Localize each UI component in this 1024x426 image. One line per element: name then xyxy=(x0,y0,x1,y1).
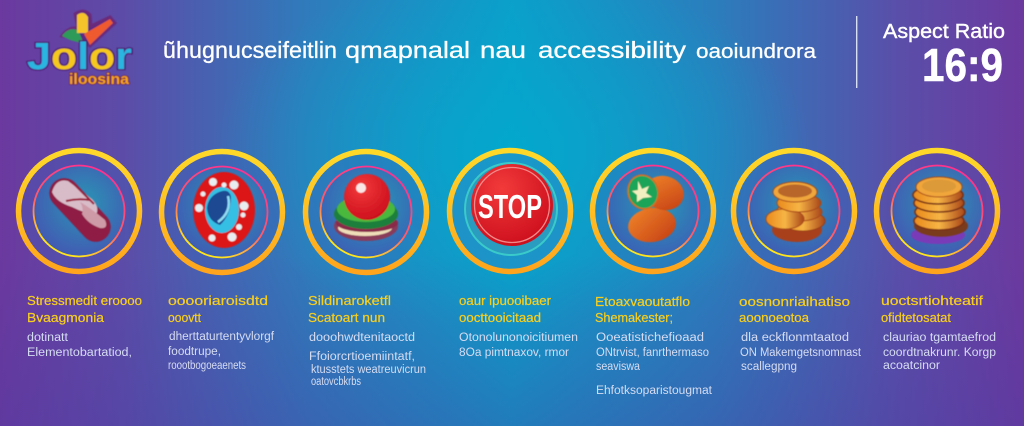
text column 2: ooovtt xyxy=(168,310,201,325)
stop label: STOP xyxy=(478,188,542,225)
icon 6: pile of coins xyxy=(734,150,854,272)
aspect ratio value: 16:9 xyxy=(922,39,1003,91)
text column 4: oaur ipuooibaer xyxy=(459,293,552,308)
text column 5: Etoaxvaoutatflo xyxy=(595,294,690,309)
icon 7: stacked coins xyxy=(876,150,998,272)
text column 1: Elementobartatiod, xyxy=(27,347,132,359)
title: accessibility xyxy=(538,37,687,63)
text column 5: Shemakester; xyxy=(595,310,673,325)
text column 6: ON Makemgetsnomnast xyxy=(740,347,862,359)
aspect ratio xyxy=(883,21,1005,91)
title: oaoiundrora xyxy=(696,41,817,63)
text column 2 xyxy=(168,293,275,372)
text column 6: oosnonriaihatiso xyxy=(739,294,850,309)
text column 3: Ffoiorcrtioemiintatf, xyxy=(309,351,415,363)
icon 4: stop button xyxy=(450,150,570,272)
text column 5: ONtrvist, fanrthermaso xyxy=(596,347,709,359)
text column 3: ktusstets weatreuvicrun xyxy=(311,364,426,376)
text column 5: Ehfotksoparistougmat xyxy=(596,385,713,397)
text column 3: dooohwdtenitaoctd xyxy=(309,332,415,344)
text column 5: seaviswa xyxy=(596,361,641,373)
text column 2: dherttaturtentyvlorgf xyxy=(169,331,275,343)
text column 3: Scatoart nun xyxy=(308,310,385,325)
icon 1: bandage xyxy=(18,150,140,272)
icon 2: jewelled gem xyxy=(162,152,282,272)
text column 7: uoctsrtiohteatif xyxy=(881,293,983,308)
text column 2: roootbogoeaenets xyxy=(168,360,246,372)
aspect ratio label: Aspect Ratio xyxy=(883,21,1005,43)
text column 2: ooooriaroisdtd xyxy=(168,293,268,308)
logo: subtitle: iloosina xyxy=(69,71,130,88)
logo xyxy=(27,11,132,88)
text column 4: 8Oa pimtnaxov, rmor xyxy=(459,347,569,359)
text column 5: Ooeatistichefioaad xyxy=(596,332,704,344)
text column 6: scallegpng xyxy=(741,361,797,373)
title xyxy=(163,37,817,63)
divider xyxy=(856,16,857,88)
text column 1 xyxy=(27,293,142,359)
text column 1: Stressmedit eroooo xyxy=(27,293,142,308)
icon 5: orange fruit xyxy=(592,150,714,272)
text column 1: dotinatt xyxy=(27,332,69,344)
text column 5 xyxy=(595,294,713,397)
text column 3: Sildinaroketfl xyxy=(308,293,391,308)
text column 4: Otonolunonoicitiumen xyxy=(459,332,578,344)
icon 3: red ball on layered base xyxy=(306,152,426,272)
text column 7: ofidtetosatat xyxy=(881,310,951,325)
title: qmapnalal xyxy=(345,37,470,63)
text column 4: oocttooicitaad xyxy=(459,310,541,325)
title: nau xyxy=(480,37,526,63)
text column 3 xyxy=(308,293,426,388)
text column 6 xyxy=(739,294,862,373)
logo: wordmark: Jolor xyxy=(27,36,132,78)
logo: colourful mascot shape xyxy=(62,11,115,46)
text column 1: Bvaagmonia xyxy=(27,310,105,325)
text column 7 xyxy=(881,293,996,372)
text column 7: coordtnakrunr. Korgp xyxy=(883,347,996,359)
text column 2: foodtrupe, xyxy=(168,346,221,358)
text column 6: aoonoeotoa xyxy=(739,310,810,325)
text column 3: oatovcbkrbs xyxy=(311,376,361,388)
title: ũhugnucseifeitlin xyxy=(163,37,337,63)
text column 7: clauriao tgamtaefrod xyxy=(883,332,996,344)
text column 6: dla eckflonmtaatod xyxy=(741,332,849,344)
text column 4 xyxy=(459,293,578,359)
text column 7: acoatcinor xyxy=(883,360,940,372)
